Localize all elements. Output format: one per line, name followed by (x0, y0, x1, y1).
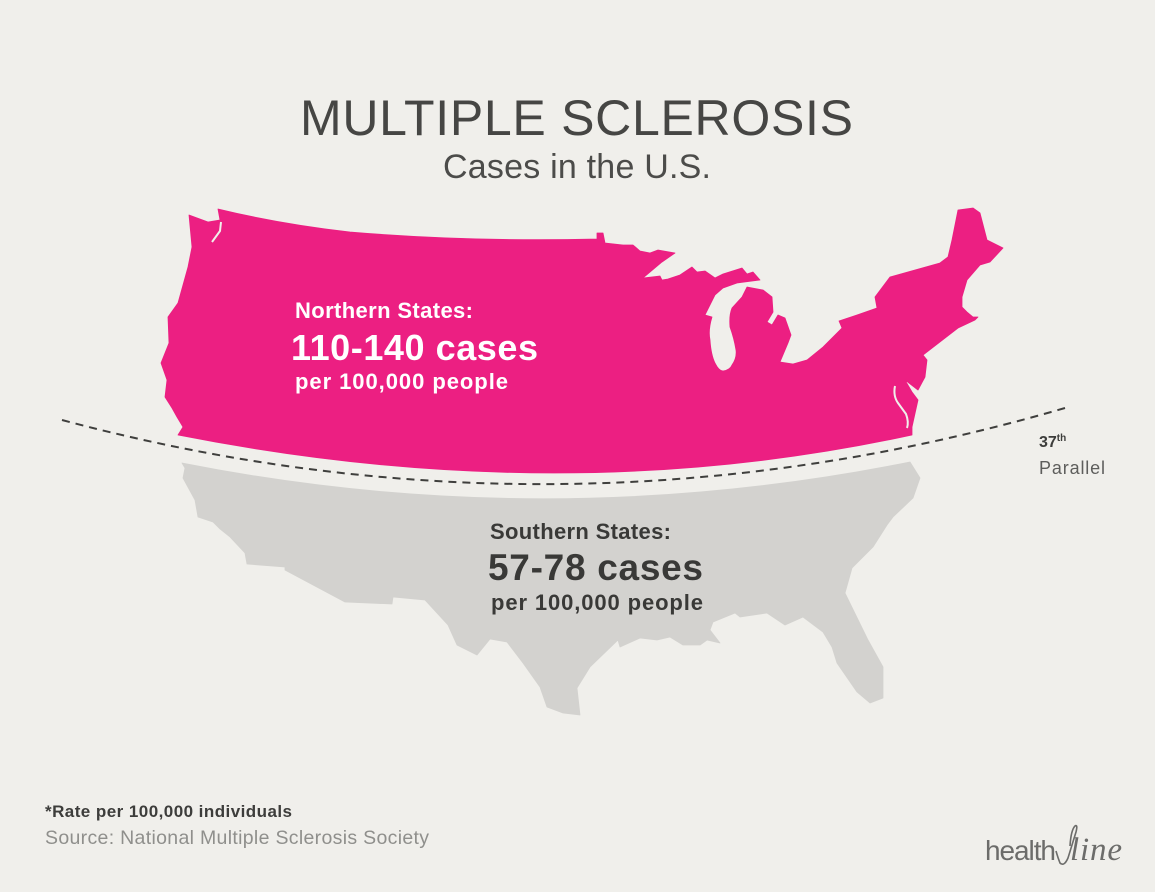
northern value: 110-140 cases (291, 327, 538, 368)
map: southern states (182, 462, 920, 715)
Chesapeake Bay (894, 386, 908, 428)
southern states text (488, 519, 703, 615)
source: Source: National Multiple Sclerosis Society (45, 827, 429, 849)
northern states text (291, 298, 538, 394)
37th: 37 (1039, 434, 1057, 451)
northern unit: per 100,000 people (295, 369, 508, 394)
37th parallel dashed line (62, 408, 1065, 484)
logo wordmark: health (985, 835, 1056, 866)
southern value: 57-78 cases (488, 547, 703, 588)
logo script: line (1070, 832, 1122, 868)
northern label: Northern States: (295, 298, 473, 323)
parallel label (1039, 433, 1105, 478)
37th: th (1057, 433, 1066, 444)
Puget Sound (212, 222, 221, 242)
southern label: Southern States: (490, 519, 671, 544)
logo flourish (1056, 826, 1077, 864)
southern unit: per 100,000 people (491, 590, 703, 615)
healthline logo (985, 826, 1122, 868)
Parallel: Parallel (1039, 458, 1105, 478)
title: MULTIPLE SCLEROSIS (300, 90, 853, 146)
map: northern states (161, 208, 1003, 473)
footnote: *Rate per 100,000 individuals (45, 802, 292, 821)
subtitle: Cases in the U.S. (443, 148, 711, 186)
